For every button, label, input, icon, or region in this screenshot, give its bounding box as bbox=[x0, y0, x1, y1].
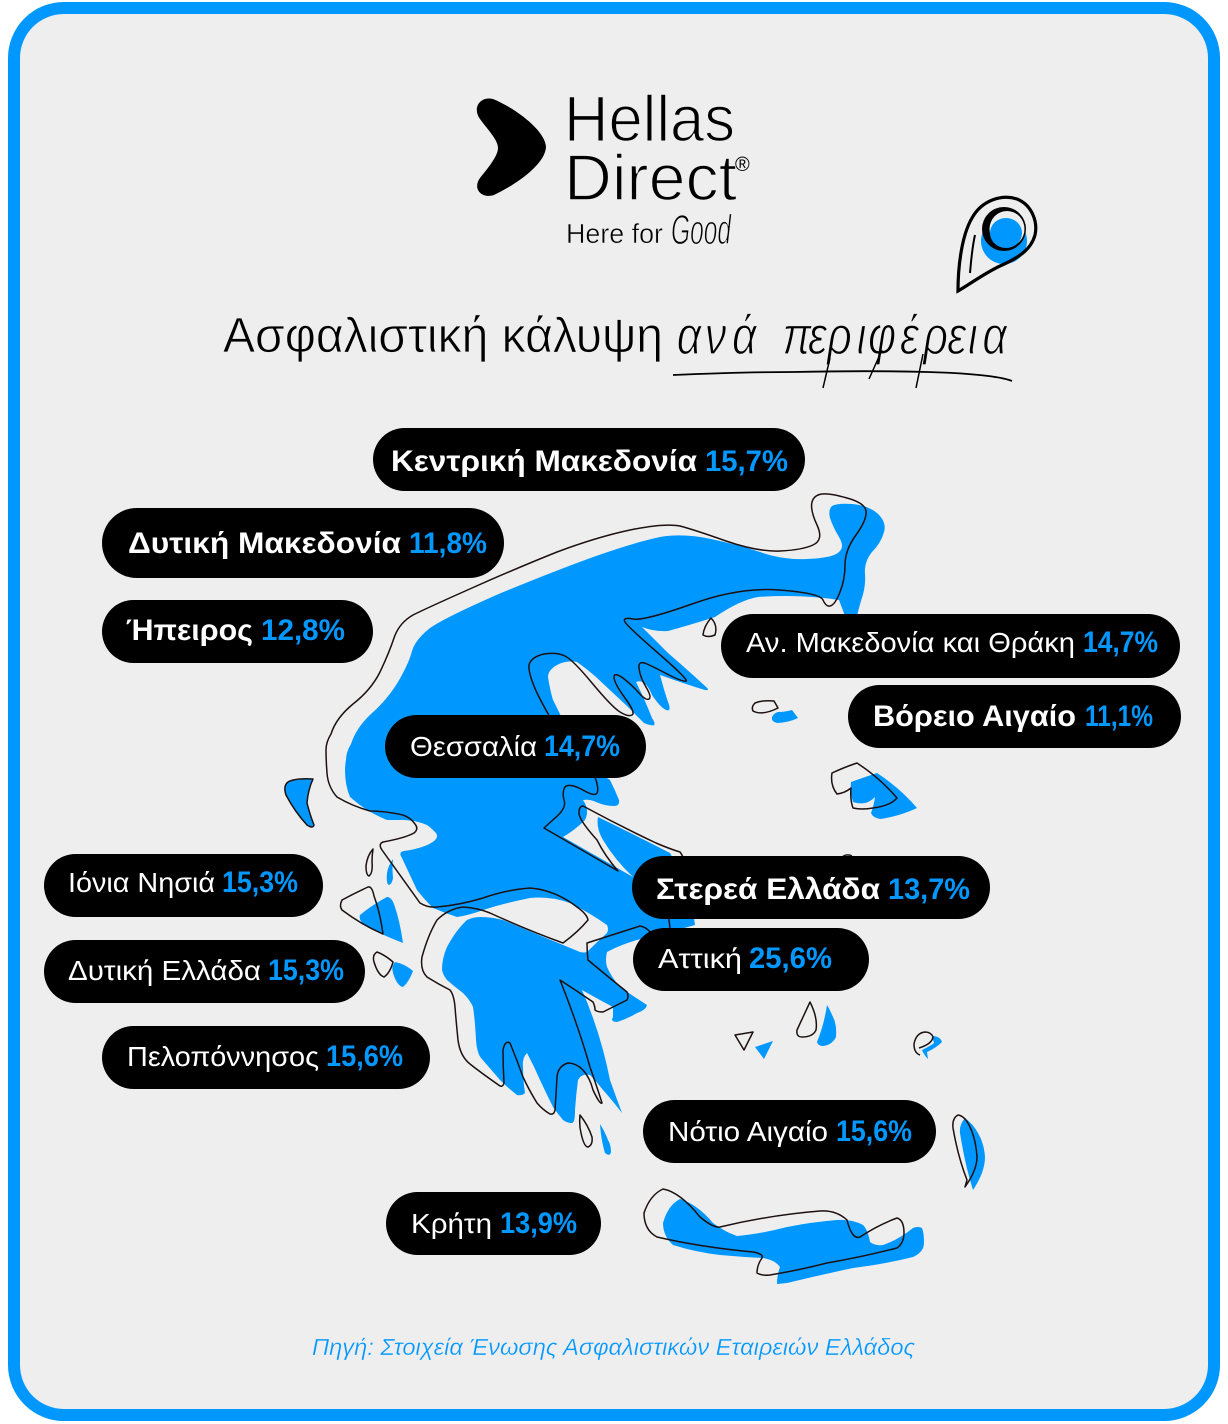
title underline bbox=[673, 371, 1012, 381]
pill: Νότιο Αιγαίο: 15,6% bbox=[836, 1115, 912, 1148]
logo: Hellas Direct bbox=[477, 82, 750, 253]
title script descenders bbox=[823, 350, 923, 388]
pill: Πελοπόννησος bbox=[102, 1026, 430, 1089]
pill: Στερεά Ελλάδα bbox=[632, 856, 990, 919]
pill: Θεσσαλία: 14,7% bbox=[544, 730, 620, 763]
pill: Ιόνια Νησιά: Ιόνια Νησιά bbox=[68, 867, 215, 898]
logo tagline: Here for bbox=[566, 218, 663, 249]
pill: Αν. Μακεδονία και Θράκη bbox=[721, 614, 1180, 678]
pill: Κρήτη: Κρήτη bbox=[411, 1208, 492, 1239]
pill: Ιόνια Νησιά: 15,3% bbox=[222, 866, 298, 899]
pill: Ήπειρος bbox=[102, 600, 373, 663]
pill: Πελοπόννησος: 15,6% bbox=[326, 1040, 403, 1073]
pill: Δυτική Ελλάδα bbox=[44, 940, 365, 1003]
pill: Αν. Μακεδονία και Θράκη: Αν. Μακεδονία και Θράκη bbox=[746, 627, 1075, 658]
logo wordmark: Hellas bbox=[564, 82, 735, 155]
pill: Κρήτη bbox=[386, 1192, 601, 1255]
pill: Στερεά Ελλάδα: Στερεά Ελλάδα bbox=[656, 873, 881, 906]
pill: Ήπειρος: 12,8% bbox=[261, 614, 345, 647]
pill: Στερεά Ελλάδα: 13,7% bbox=[888, 873, 970, 906]
pill: Αττική: 25,6% bbox=[749, 942, 832, 975]
pill: Θεσσαλία: Θεσσαλία bbox=[410, 731, 537, 762]
pill: Πελοπόννησος: Πελοπόννησος bbox=[127, 1041, 319, 1072]
pill: Αττική: Αττική bbox=[658, 943, 742, 974]
pill: Βόρειο Αιγαίο bbox=[848, 685, 1181, 748]
pill: Βόρειο Αιγαίο: 11,1% bbox=[1085, 700, 1153, 733]
pill: Δυτική Μακεδονία: 11,8% bbox=[409, 527, 487, 560]
pill: Ιόνια Νησιά bbox=[44, 854, 323, 917]
pill: Δυτική Ελλάδα: Δυτική Ελλάδα bbox=[68, 955, 261, 986]
pill: Ήπειρος: Ήπειρος bbox=[126, 614, 253, 647]
icon: location pin bbox=[958, 197, 1036, 291]
title bbox=[223, 307, 1009, 366]
map: black outline of Crete bbox=[644, 1189, 904, 1275]
map: blue Evia bbox=[598, 817, 690, 890]
pill: Δυτική Ελλάδα: 15,3% bbox=[268, 954, 344, 987]
pill: Κεντρική Μακεδονία: Κεντρική Μακεδονία bbox=[391, 445, 698, 478]
map: blue Crete bbox=[663, 1199, 924, 1284]
source note: Πηγή: Στοιχεία Ένωσης Ασφαλιστικών Εταιρειών Ελλάδος bbox=[312, 1334, 916, 1360]
pill: Θεσσαλία bbox=[385, 715, 646, 778]
title script part: ανά περιφέρεια bbox=[677, 307, 1009, 366]
pill: Κεντρική Μακεδονία: 15,7% bbox=[705, 445, 788, 478]
pill: Κεντρική Μακεδονία bbox=[373, 428, 805, 491]
pill: Αν. Μακεδονία και Θράκη: 14,7% bbox=[1083, 626, 1158, 659]
pill: Κρήτη: 13,9% bbox=[500, 1207, 577, 1240]
logo tagline bbox=[566, 206, 732, 253]
map: blue islands bbox=[285, 710, 985, 1190]
pill: Νότιο Αιγαίο bbox=[643, 1100, 936, 1163]
pill: Βόρειο Αιγαίο: Βόρειο Αιγαίο bbox=[873, 700, 1076, 733]
map of Greece bbox=[285, 494, 985, 1284]
map: black island outlines bbox=[285, 618, 977, 1187]
title: Ασφαλιστική κάλυψη bbox=[223, 309, 663, 363]
icon: boomerang mark bbox=[477, 99, 546, 196]
pill: Αττική bbox=[633, 928, 869, 991]
logo wordmark bbox=[564, 82, 750, 214]
pill: Δυτική Μακεδονία: Δυτική Μακεδονία bbox=[128, 527, 402, 560]
map: blue mainland bbox=[345, 504, 885, 1123]
pill: Δυτική Μακεδονία bbox=[102, 508, 504, 578]
logo wordmark: ® bbox=[735, 154, 750, 176]
logo tagline: Good bbox=[671, 206, 732, 253]
pill: Νότιο Αιγαίο: Νότιο Αιγαίο bbox=[668, 1116, 828, 1147]
logo wordmark: Direct bbox=[564, 141, 737, 214]
map: black outline of mainland bbox=[326, 494, 866, 1114]
